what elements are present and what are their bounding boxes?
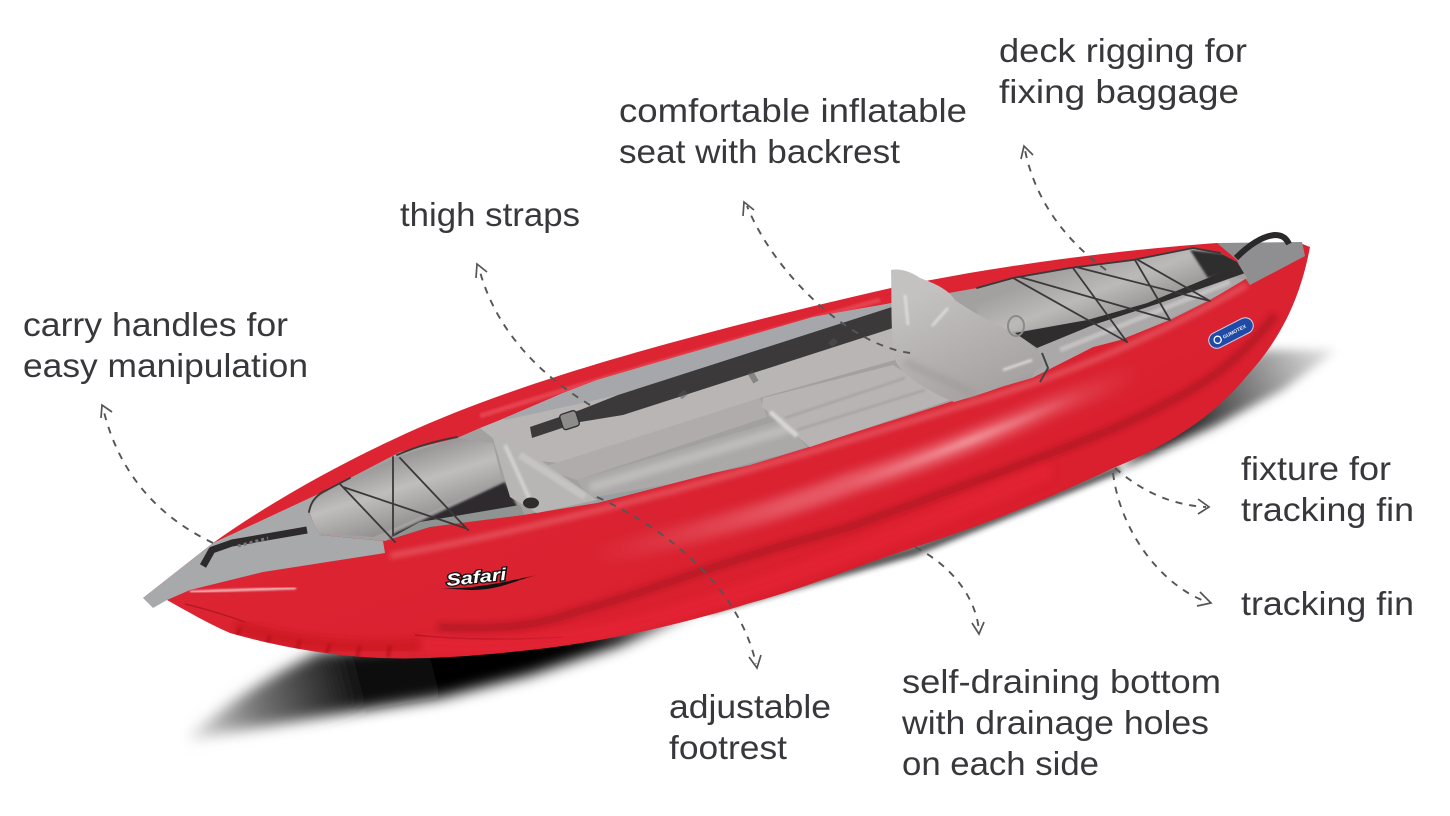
label: inflatable seat: seat with backrest <box>619 133 900 170</box>
stern deck rigging <box>1013 260 1210 342</box>
label: carry handles: carry handles for <box>23 306 288 343</box>
bow carry handle <box>203 530 307 566</box>
bow deck rigging <box>340 457 468 542</box>
bow coaming tube <box>310 438 502 537</box>
kayak <box>143 235 1310 658</box>
label: adjustable footrest: footrest <box>669 729 787 766</box>
arrow: thigh straps <box>476 264 590 405</box>
blue brand badge <box>1206 315 1256 351</box>
arrow: carry handles <box>101 405 213 543</box>
arrow: inflatable seat <box>743 202 910 353</box>
thigh strap <box>530 307 893 438</box>
label: adjustable footrest <box>669 688 831 766</box>
label: deck rigging: fixing baggage <box>999 73 1239 110</box>
label: deck rigging <box>999 32 1247 110</box>
floor seat cushion <box>762 365 950 447</box>
stern tubes <box>1032 277 1250 380</box>
label: inflatable seat: comfortable inflatable <box>619 92 967 129</box>
label: self-draining bottom: with drainage holes <box>901 704 1209 741</box>
label: self-draining bottom: on each side <box>902 745 1099 782</box>
label: self-draining bottom <box>901 663 1221 782</box>
coaming edges <box>309 248 1220 512</box>
Safari logo <box>438 565 537 590</box>
cockpit interior <box>308 249 1247 541</box>
ground shadow <box>185 350 1337 740</box>
label: adjustable footrest: adjustable <box>669 688 831 725</box>
stern deck <box>1217 242 1305 285</box>
Safari logo: Safari <box>445 565 509 590</box>
label: inflatable seat <box>619 92 967 170</box>
hull <box>143 243 1310 658</box>
blue brand badge: GUMOTEX <box>1222 324 1248 341</box>
arrow: self-draining bottom <box>915 547 984 634</box>
label: self-draining bottom: self-draining bottom <box>902 663 1221 700</box>
floor tubes <box>540 398 767 480</box>
arrow: deck rigging <box>1021 146 1106 270</box>
inflatable seat with backrest <box>891 269 1048 402</box>
label: deck rigging: deck rigging for <box>999 32 1247 69</box>
stern carry handle <box>1236 235 1289 258</box>
label: fixture for tracking fin: tracking fin <box>1241 491 1414 528</box>
label: fixture for tracking fin: fixture for <box>1241 450 1391 487</box>
label: thigh straps: thigh straps <box>400 196 580 233</box>
arrow: tracking fin <box>1113 473 1211 606</box>
label: fixture for tracking fin <box>1241 450 1414 528</box>
bow deck <box>143 490 385 608</box>
arrow: adjustable footrest <box>597 497 761 668</box>
label: tracking fin: tracking fin <box>1241 585 1414 622</box>
label: carry handles <box>23 306 308 384</box>
side wall <box>480 300 895 463</box>
adjustable footrest pad <box>493 437 597 513</box>
arrow: fixture for tracking fin <box>1115 468 1209 514</box>
label: carry handles: easy manipulation <box>23 347 308 384</box>
